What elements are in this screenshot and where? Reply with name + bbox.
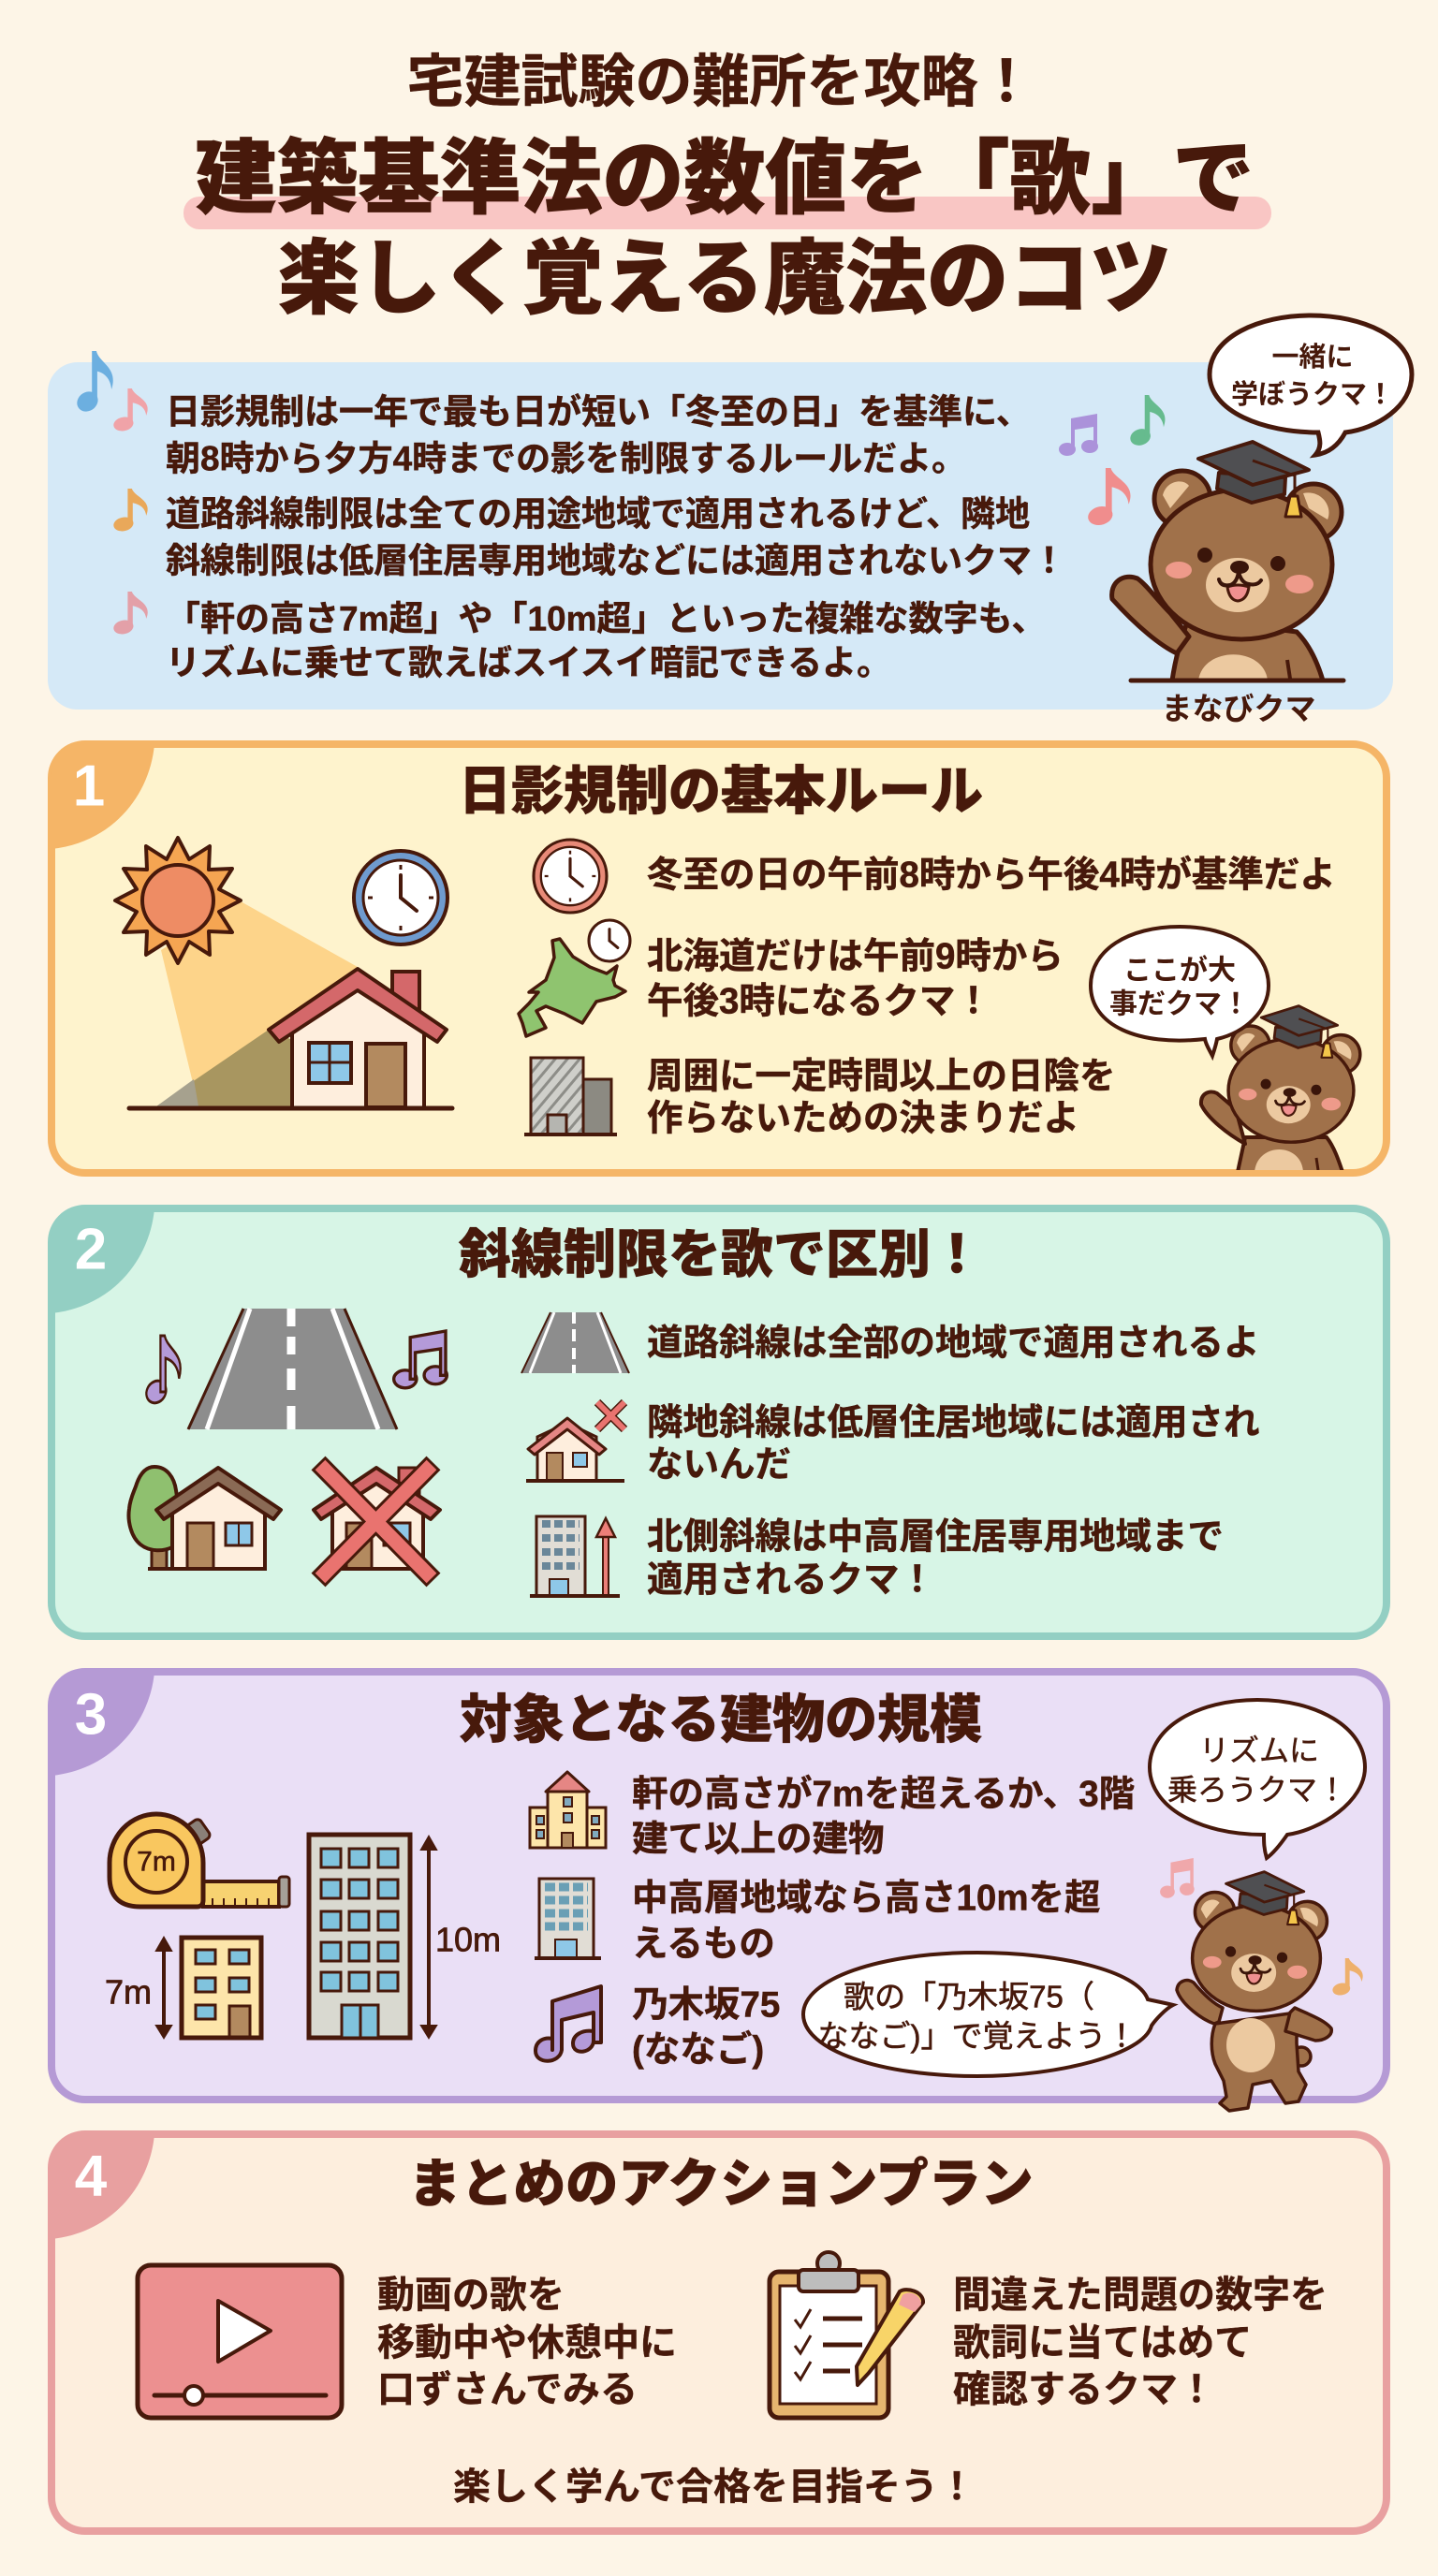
action text 1: 口ずさんでみる (377, 2369, 638, 2410)
row: neighbour slant (647, 1402, 1260, 1485)
icon: Hokkaido map (519, 920, 630, 1036)
intro text 2 (166, 494, 1066, 580)
illustration: allowed house (129, 1467, 281, 1569)
row: Nogizaka75: 乃木坂75 (632, 1984, 780, 2026)
action text 1 (377, 2275, 677, 2410)
action text 2: 確認するクマ！ (953, 2369, 1215, 2410)
number tab 2: 2 (75, 1217, 107, 1282)
speech bubble: song (803, 1953, 1173, 2076)
heading 1: 日影規制の基本ルール (459, 762, 983, 820)
intro text 1: 日影規制は一年で最も日が短い「冬至の日」を基準に、 (166, 393, 1031, 431)
intro text 1: 朝8時から夕方4時までの影を制限するルールだよ。 (166, 440, 966, 477)
row: Hokkaido (647, 936, 1064, 1022)
heading 3: 対象となる建物の規模 (460, 1690, 982, 1749)
icon: tape measure: 7m (137, 1846, 176, 1878)
intro text 3 (166, 599, 1046, 681)
action text 2: 間違えた問題の数字を (953, 2275, 1328, 2316)
title: 建築基準法の数値を「歌」で (195, 133, 1255, 225)
row: Hokkaido: 午後3時になるクマ！ (647, 981, 991, 1022)
number tab 3: 3 (75, 1683, 107, 1747)
illustration: 10m building: 10m (435, 1921, 501, 1958)
row: winter solstice: 冬至の日の午前8時から午後4時が基準だよ (647, 856, 1336, 895)
speech bubble: important (1091, 927, 1269, 1056)
icon: blue note (75, 351, 113, 415)
title: 宅建試験の難所を攻略！ (406, 50, 1035, 113)
panel 2: slant limits (51, 1208, 1387, 1636)
icon: house with cross (526, 1402, 624, 1481)
intro text 2: 斜線制限は低層住居専用地域などには適用されないクマ！ (166, 541, 1066, 580)
icon: clock (534, 840, 607, 913)
row: eaves height (632, 1775, 1135, 1859)
action text 1: 動画の歌を (377, 2275, 565, 2316)
action text 2: 歌詞に当てはめて (953, 2322, 1252, 2364)
row: Nogizaka75 (632, 1984, 780, 2071)
panel 1: shadow rule (51, 744, 1387, 1173)
intro text 3: リズムに乗せて歌えばスイスイ暗記できるよ。 (166, 644, 891, 681)
row: north slant (647, 1516, 1224, 1601)
title: 楽しく覚える魔法のコツ (278, 234, 1171, 324)
icon: small road (521, 1312, 629, 1373)
icon: shaded buildings (524, 1058, 617, 1134)
intro text 3: 「軒の高さ7m超」や「10m超」といった複雑な数字も、 (166, 599, 1046, 638)
row: Hokkaido: 北海道だけは午前9時から (647, 936, 1064, 977)
number tab 4 (51, 2134, 154, 2239)
icon: pink note (1085, 468, 1131, 528)
number tab 3 (51, 1672, 154, 1776)
intro text 2: 道路斜線制限は全ての用途地域で適用されるけど、隣地 (166, 494, 1030, 534)
icon: mid-rise (535, 1879, 601, 1958)
row: eaves height: 軒の高さが7mを超えるか、3階 (632, 1775, 1135, 1814)
icon: green note (1128, 395, 1166, 448)
row: mid-rise (632, 1878, 1101, 1964)
action text 1: 移動中や休憩中に (377, 2322, 677, 2364)
icon: bullet note orange (111, 489, 148, 534)
bear mascot 2 (1201, 1006, 1360, 1172)
illustration: sun and house (115, 838, 452, 1108)
icon: orange note (1330, 1958, 1363, 1998)
panel 4: action plan (51, 2134, 1387, 2531)
heading 4: まとめのアクションプラン (408, 2155, 1034, 2213)
speech bubble: rhythm: 乗ろうクマ！ (1167, 1773, 1347, 1807)
speech bubble: rhythm: リズムに (1199, 1734, 1319, 1767)
row: north slant: 適用されるクマ！ (647, 1559, 935, 1601)
icon: tape measure (110, 1814, 289, 1907)
icon: school (530, 1772, 606, 1848)
title (183, 50, 1271, 324)
panel 3: building scale (51, 1672, 1387, 2111)
icon: note left (144, 1336, 181, 1407)
number tab 4: 4 (75, 2144, 108, 2209)
speech bubble: song: 歌の「乃木坂75（ (844, 1979, 1094, 2014)
intro text 1 (166, 393, 1031, 477)
illustration: 7m building: 7m (105, 1973, 152, 2011)
illustration: 7m building (105, 1938, 261, 2038)
row: surroundings (647, 1056, 1116, 1138)
icon: bullet note pink (111, 388, 148, 433)
heading 2: 斜線制限を歌で区別！ (459, 1224, 983, 1284)
row: road slant: 道路斜線は全部の地域で適用されるよ (647, 1324, 1260, 1363)
icon: video player (138, 2265, 342, 2418)
panel: intro (48, 315, 1412, 726)
number tab 2 (51, 1208, 154, 1313)
row: surroundings: 作らないための決まりだよ (647, 1099, 1079, 1138)
row: surroundings: 周囲に一定時間以上の日陰を (647, 1056, 1116, 1097)
action text 2 (953, 2275, 1328, 2410)
speech bubble: important: ここが大 (1123, 955, 1236, 987)
speech bubble: important: 事だクマ！ (1109, 988, 1250, 1020)
icon: notes right (394, 1331, 447, 1388)
speech bubble: rhythm (1150, 1700, 1365, 1858)
speech bubble: greeting: 学ぼうクマ！ (1231, 379, 1394, 410)
speech bubble: song: ななご)」で覚えよう！ (818, 2018, 1137, 2054)
row: mid-rise: 中高層地域なら高さ10mを超 (632, 1878, 1101, 1919)
icon: purple notes (1059, 414, 1098, 456)
icon: music note (536, 1986, 601, 2061)
row: Nogizaka75: (ななご) (632, 2029, 764, 2071)
icon: bullet note muted (111, 592, 148, 637)
speech bubble: greeting: 一緒に (1271, 342, 1354, 373)
row: north slant: 北側斜線は中高層住居専用地域まで (647, 1516, 1224, 1558)
number tab 1 (51, 744, 154, 849)
number tab 1: 1 (73, 754, 105, 818)
illustration: 10m building (309, 1835, 501, 2038)
icon: pink notes (1160, 1858, 1195, 1898)
bear mascot (1112, 442, 1343, 681)
icon: building with arrow (530, 1516, 620, 1596)
icon: clipboard and pencil (770, 2252, 923, 2418)
row: neighbour slant: 隣地斜線は低層住居地域には適用され (647, 1402, 1260, 1443)
row: mid-rise: えるもの (632, 1925, 775, 1964)
mascot name: まなびクマ (1161, 691, 1316, 726)
row: neighbour slant: ないんだ (647, 1445, 791, 1485)
illustration: crossed house (314, 1463, 440, 1580)
closing message: 楽しく学んで合格を目指そう！ (453, 2466, 976, 2508)
speech bubble: greeting (1210, 315, 1412, 455)
illustration: road (144, 1309, 447, 1429)
row: eaves height: 建て以上の建物 (632, 1820, 885, 1859)
bear mascot 3 (1177, 1872, 1331, 2111)
